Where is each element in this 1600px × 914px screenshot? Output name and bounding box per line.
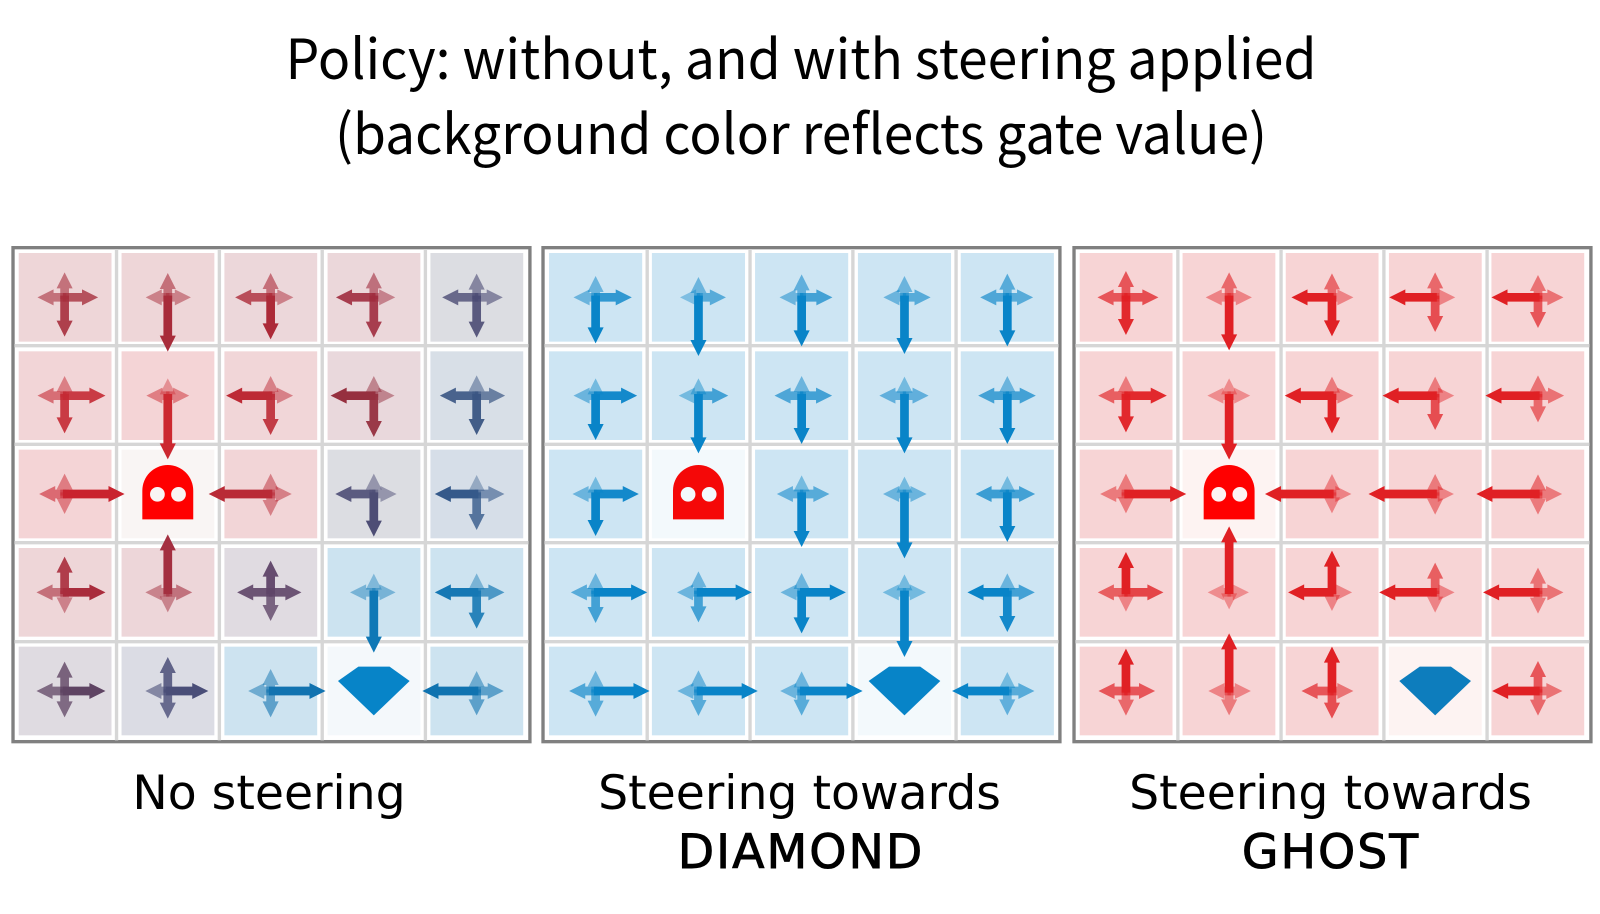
caption: steering towards ghost [1129,766,1532,880]
caption: no steering: No steering [132,766,406,821]
cell backgrounds [549,253,1054,735]
panel: steering towards ghost [1074,248,1591,742]
policy arrows [569,274,1036,717]
icon: diamond [1399,667,1471,715]
cell backgrounds [19,253,523,735]
icon: ghost [142,465,193,519]
caption: steering towards diamond: Steering towards [598,766,1001,821]
policy arrows [1097,271,1564,719]
title: (background color reflects gate value) [335,90,1267,170]
policy arrows [36,272,505,719]
icon: ghost [673,465,724,519]
panel: no steering [13,248,530,742]
icon: diamond [869,667,940,715]
caption: steering towards ghost: GHOST [1242,825,1420,880]
cell backgrounds [1080,253,1584,735]
title [286,15,1316,170]
caption: steering towards ghost: Steering towards [1129,766,1532,821]
icon: ghost [1204,465,1255,519]
panel: steering towards diamond [543,248,1060,742]
title: Policy: without, and with steering applied [286,15,1316,95]
caption: steering towards diamond [598,766,1001,880]
caption: steering towards diamond: DIAMOND [678,825,924,880]
icon: diamond [338,667,410,715]
